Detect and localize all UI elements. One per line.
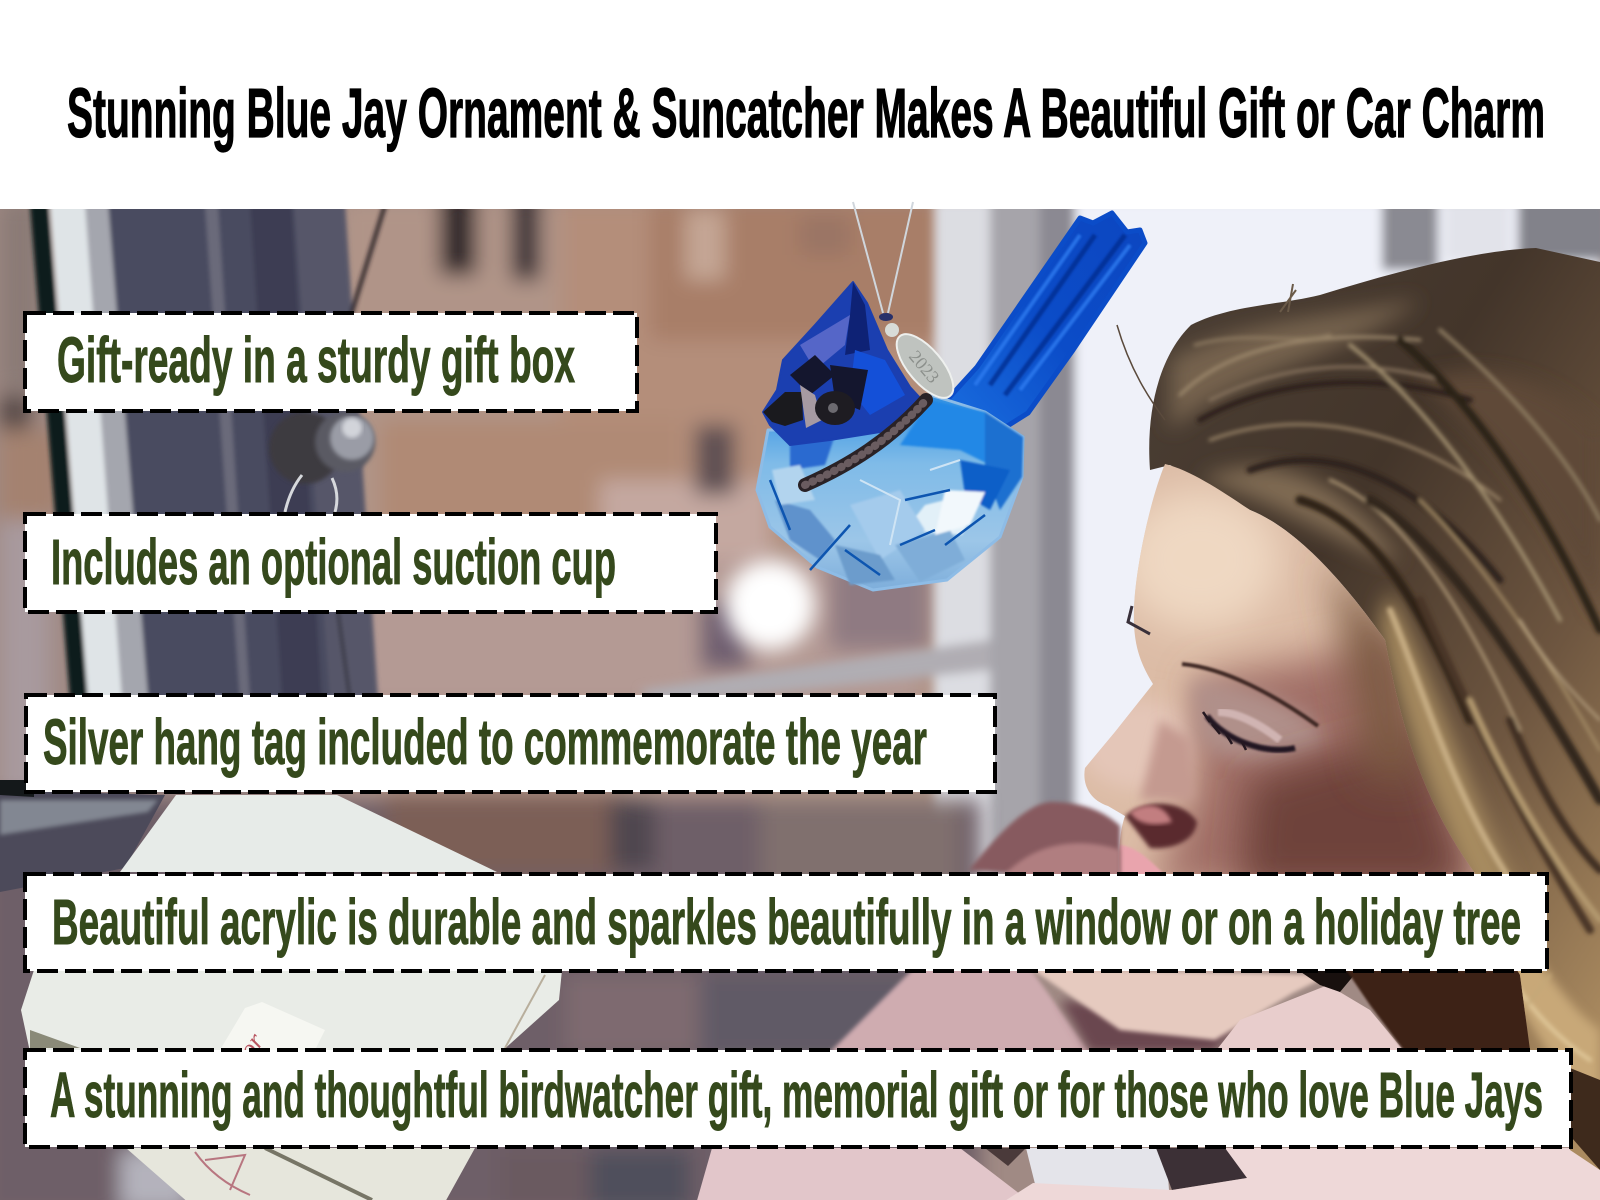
feature label: suction cup [25,514,716,612]
body facets [772,400,1023,585]
gift box [21,795,562,1200]
woman: face [970,464,1476,874]
feature label: gift box: Gift-ready in a sturdy gift box [57,324,575,396]
head [763,282,922,445]
woman: hair [1117,240,1600,1180]
left window sill [0,780,165,892]
suction hook on the window [269,412,375,512]
cord bead and clasp [879,313,893,321]
feature label: suction cup: Includes an optional suction cup [51,526,616,598]
blurred building behind the window [0,190,960,820]
hanging cord [853,202,913,313]
tail [947,213,1145,440]
blown-out highlight [725,560,815,650]
window mullion and sky [640,200,1600,920]
woman: arms and sweater [696,968,1600,1200]
feature label: silver hang tag: Silver hang tag included to commemorate the year [43,706,927,778]
silver tag: 2023 [905,346,943,387]
body [757,395,1023,590]
feature label: gift box [25,313,637,411]
silver tag [887,325,963,407]
glitter collar [805,400,926,485]
page header background [0,0,1600,209]
window frame: black edge, white stripe, slate panel [30,205,385,700]
feature label: silver hang tag [26,695,995,792]
ornament: blue jay with hang tag [757,202,1145,590]
lower darker interior [0,795,980,1200]
black face and beak [763,392,803,426]
gift box: or [233,1027,270,1063]
